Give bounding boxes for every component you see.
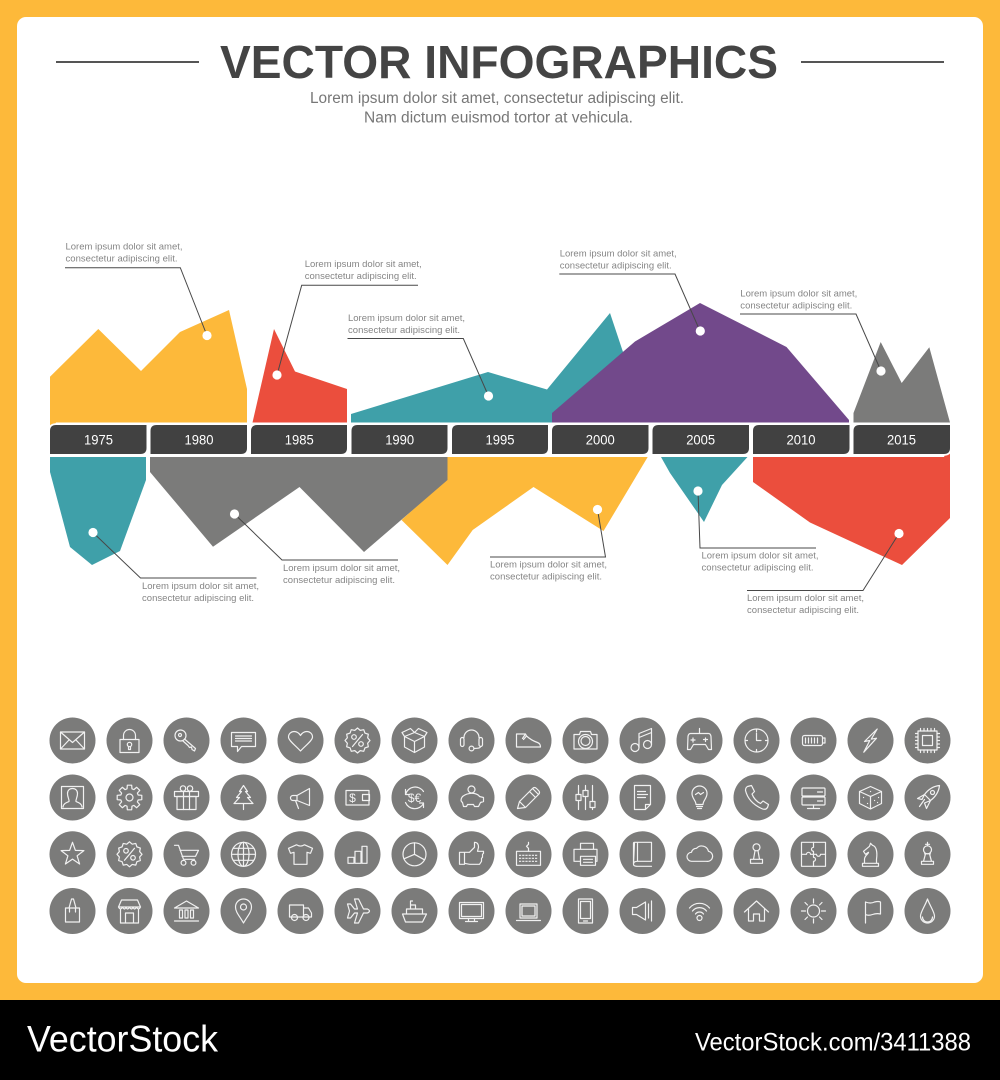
icon: chess king: [904, 831, 950, 877]
area: upper yellow 1975-1980: [50, 310, 247, 432]
tab 1990: [352, 425, 448, 454]
footer image id: VectorStock.com/3411388: [695, 1028, 971, 1056]
area: lower yellow 1995-2000: [402, 457, 648, 565]
icon: rocket: [904, 774, 950, 820]
icon: wifi: [676, 888, 722, 934]
title right rule: [801, 61, 944, 63]
subtitle: Lorem ipsum dolor sit amet, consectetur adipiscing elit.: [310, 90, 684, 107]
icon: tablet: [562, 888, 608, 934]
icon: printer: [562, 831, 608, 877]
callout: lower grey: [230, 509, 400, 586]
tab 2000: [552, 425, 648, 454]
icon: telephone: [734, 774, 780, 820]
area: lower red 2010-2015: [753, 444, 950, 565]
icon: padlock: [106, 718, 152, 764]
area: upper red 1985: [252, 329, 347, 422]
icon: speech bubble: [220, 718, 266, 764]
callout: lower small teal: [693, 486, 818, 574]
tab 1980: [150, 425, 247, 454]
callout: lower grey: consectetur adipiscing elit.: [283, 575, 395, 586]
icon: sliders: [562, 774, 608, 820]
footer band: [0, 1000, 1000, 1080]
callout: lower yellow: consectetur adipiscing elit.: [490, 572, 602, 583]
icon: dice: [848, 774, 894, 820]
callout: lower red: Lorem ipsum dolor sit amet,: [747, 593, 864, 604]
callout: lower grey: Lorem ipsum dolor sit amet,: [283, 563, 400, 574]
subtitle: Nam dictum euismod tortor at vehicula.: [364, 110, 633, 126]
icon: lightning bolt: [848, 718, 894, 764]
icon: document: [620, 774, 666, 820]
callout: upper grey: consectetur adipiscing elit.: [740, 300, 852, 312]
tab 1975: [50, 425, 146, 454]
icon: microchip: [904, 718, 950, 764]
icon: shopping bag: [50, 888, 96, 934]
tab 2005: 2005: [686, 432, 715, 448]
timeline chart: [50, 242, 950, 616]
icon: pine tree: [220, 774, 266, 820]
icon: book: [620, 831, 666, 877]
title: VECTOR INFOGRAPHICS: [220, 36, 778, 88]
area: upper teal 1990-2000: [351, 313, 625, 422]
icon: wallet: $: [349, 791, 356, 805]
icon: star: [50, 831, 96, 877]
area: upper grey 2015: [854, 342, 950, 422]
icon: cloud: [676, 831, 722, 877]
icon grid: [50, 718, 950, 934]
icon: key: [164, 718, 210, 764]
tab 1990: 1990: [385, 432, 414, 448]
callout: upper teal: Lorem ipsum dolor sit amet,: [348, 313, 465, 324]
subtitle: [310, 90, 684, 126]
callout: upper red: [272, 259, 422, 380]
icon: globe: [220, 831, 266, 877]
icon: speaker: [620, 888, 666, 934]
icon: laptop: [506, 888, 552, 934]
footer brand: VectorStock: [27, 1018, 218, 1060]
callout: upper teal: [348, 313, 493, 401]
icon: gear: [106, 774, 152, 820]
icon: percent badge: [334, 718, 380, 764]
tab 1985: 1985: [285, 432, 314, 448]
icon: pencil: [506, 774, 552, 820]
icon: pawn: [734, 831, 780, 877]
callout: upper teal: consectetur adipiscing elit.: [348, 325, 460, 336]
title left rule: [56, 61, 199, 63]
icon: keyboard: [506, 831, 552, 877]
tab 1985: [251, 425, 347, 454]
year bar: [50, 425, 950, 454]
area: lower grey 1980-1990: [150, 457, 448, 552]
callout: lower red: consectetur adipiscing elit.: [747, 605, 859, 616]
callout: upper purple: Lorem ipsum dolor sit amet,: [560, 248, 677, 260]
header block: [56, 36, 944, 126]
icon: truck: [278, 888, 324, 934]
icon: sun: [790, 888, 836, 934]
icon: portrait: [50, 774, 96, 820]
icon: bar chart: [334, 831, 380, 877]
icon: percent badge 2: [106, 831, 152, 877]
icon: heart: [278, 718, 324, 764]
tab 2005: [652, 425, 749, 454]
icon: currency exchange: $€: [408, 791, 421, 805]
icon: storefront: [106, 888, 152, 934]
tab 1975: 1975: [84, 432, 113, 448]
callout: lower teal: [88, 528, 259, 604]
icon: puzzle: [790, 831, 836, 877]
icon: water drop: [904, 888, 950, 934]
tab 2015: 2015: [887, 432, 916, 448]
icon: wallet: [334, 774, 380, 820]
area: lower teal 2005: [661, 457, 748, 522]
icon: bank: [164, 888, 210, 934]
icon: map pin: [220, 888, 266, 934]
area: upper purple 2000-2010: [552, 303, 849, 422]
callout: lower small teal: consectetur adipiscing elit.: [702, 562, 814, 574]
callout: lower teal: Lorem ipsum dolor sit amet,: [142, 581, 259, 592]
icon: shopping cart: [164, 831, 210, 877]
callout: upper grey: Lorem ipsum dolor sit amet,: [740, 288, 857, 300]
tab 2015: [854, 425, 950, 454]
icon: light bulb: [676, 774, 722, 820]
icon: t-shirt: [278, 831, 324, 877]
icon: server: [790, 774, 836, 820]
icon: music notes: [620, 718, 666, 764]
area: lower teal 1975: [50, 457, 146, 565]
icon: thumbs up: [448, 831, 494, 877]
icon: shoe: [506, 718, 552, 764]
callout: upper purple: consectetur adipiscing elit.: [560, 260, 672, 272]
tab 1980: 1980: [184, 432, 214, 448]
callout: lower yellow: Lorem ipsum dolor sit amet,: [490, 560, 607, 571]
callout: lower yellow: [490, 505, 607, 583]
icon: open box: [392, 718, 438, 764]
icon: ship: [392, 888, 438, 934]
tab 1995: 1995: [486, 432, 515, 448]
callout: upper yellow: Lorem ipsum dolor sit amet,: [66, 242, 182, 252]
tab 2010: [753, 425, 850, 454]
icon: game controller: [676, 718, 722, 764]
icon: gift: [164, 774, 210, 820]
callout: upper purple: [559, 248, 705, 336]
icon: envelope: [50, 718, 96, 764]
callout: lower teal: consectetur adipiscing elit.: [142, 593, 254, 604]
icon: airplane: [334, 888, 380, 934]
icon: chess knight: [848, 831, 894, 877]
icon: house: [734, 888, 780, 934]
icon: battery: [790, 718, 836, 764]
icon: clock: [734, 718, 780, 764]
icon: currency exchange: [392, 774, 438, 820]
callout: lower red: [747, 529, 904, 616]
tab 2000: 2000: [586, 432, 615, 448]
tab 1995: [452, 425, 548, 454]
icon: piggy bank: [448, 774, 494, 820]
icon: megaphone: [278, 774, 324, 820]
icon: pie chart: [392, 831, 438, 877]
icon: flag: [848, 888, 894, 934]
callout: upper grey: [740, 288, 886, 376]
callout: upper red: consectetur adipiscing elit.: [305, 271, 417, 282]
icon: camera: [562, 718, 608, 764]
callout: upper red: Lorem ipsum dolor sit amet,: [305, 259, 422, 270]
icon: headset: [448, 718, 494, 764]
icon: monitor: [448, 888, 494, 934]
tab 2010: 2010: [786, 432, 816, 448]
callout: upper yellow: consectetur adipiscing elit.: [66, 254, 178, 264]
callout: lower small teal: Lorem ipsum dolor sit amet,: [702, 550, 818, 562]
callout: upper yellow: [65, 242, 212, 340]
